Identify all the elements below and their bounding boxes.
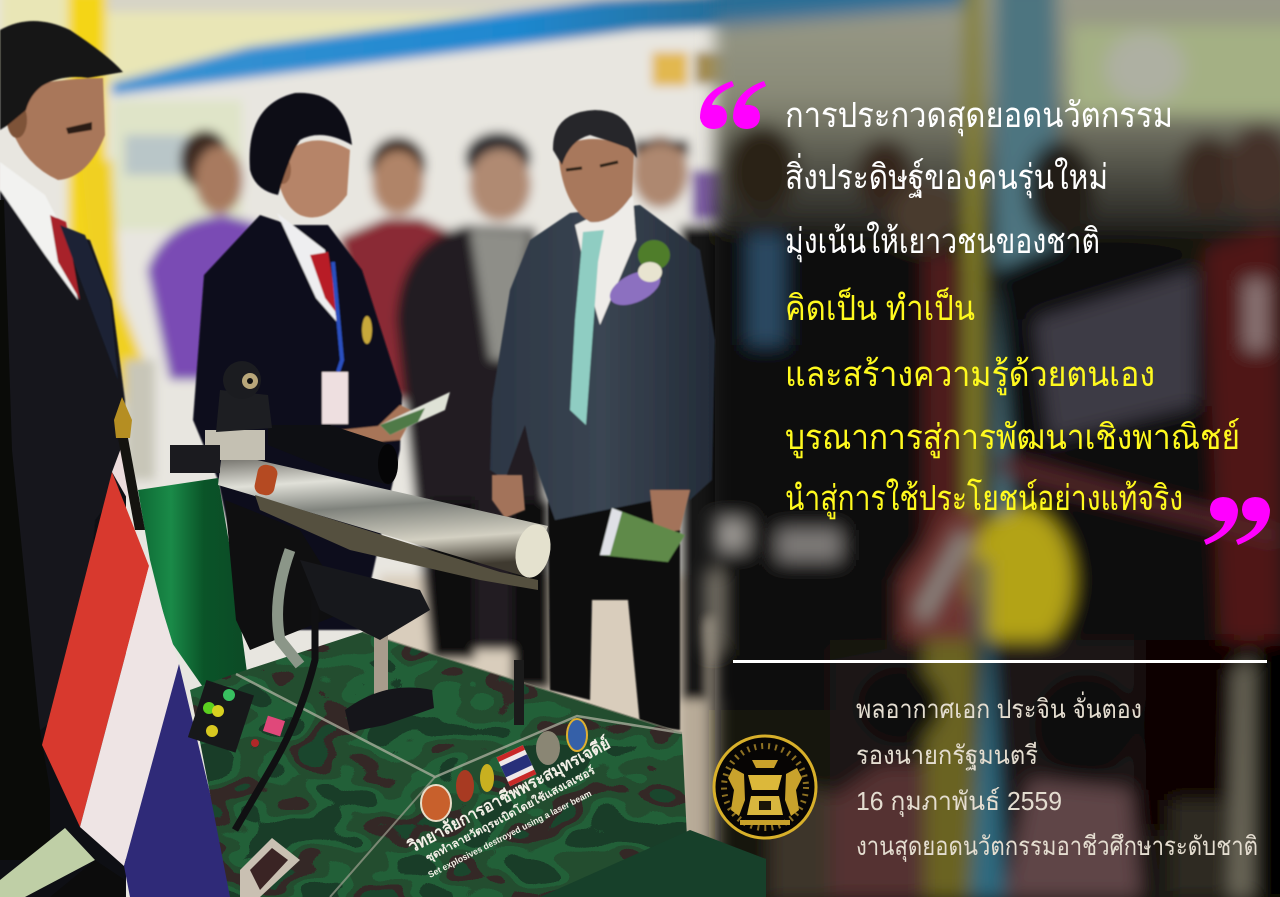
rear person bbox=[632, 136, 688, 208]
photo: left student bbox=[0, 21, 125, 730]
attribution text: 16 กุมภาพันธ์ 2559 bbox=[856, 786, 1062, 817]
robot label text: ชุดทำลายวัตถุระเบิดโดยใช้แสงเลเซอร์ bbox=[423, 763, 598, 866]
robot label text: วิทยาลัยการอาชีพพระสมุทรเจดีย์ bbox=[404, 733, 614, 858]
flag pole with gold finial bbox=[114, 397, 145, 530]
attribution text: พลอากาศเอก ประจิน จั่นตอง bbox=[856, 691, 1142, 724]
blurred crowd bodies bbox=[715, 229, 965, 640]
blurred ribbon and yellow bloom bbox=[900, 510, 980, 640]
opening quotation mark bbox=[700, 81, 766, 129]
Thai flag bbox=[42, 440, 246, 897]
seal of the Prime Minister's office bbox=[714, 736, 816, 838]
blurred lower ribbons bbox=[715, 650, 830, 710]
photo: left black object bbox=[0, 200, 125, 897]
photo: central man bbox=[490, 110, 715, 730]
blurred documents bbox=[715, 520, 747, 550]
purple shirt person bbox=[180, 130, 230, 190]
quote: white lines: มุ่งเน้นให้เยาวชนของชาติ bbox=[785, 221, 1100, 262]
blurred exhibition background bbox=[0, 0, 810, 897]
robot base with camouflage bbox=[180, 620, 780, 897]
blurred dark right panel background bbox=[706, 0, 1280, 897]
quote: yellow lines: บูรณาการสู่การพัฒนาเชิงพาณิชย์ bbox=[785, 418, 1240, 458]
robot track bbox=[240, 830, 766, 897]
lower-left dark backdrop bbox=[0, 460, 126, 897]
silver barrel bbox=[218, 452, 555, 590]
photo: middle student bbox=[193, 93, 450, 630]
quote: white lines: การประกวดสุดยอดนวัตกรรม bbox=[785, 96, 1173, 136]
dark suit person bbox=[465, 132, 531, 184]
quote: white lines: สิ่งประดิษฐ์ของคนรุ่นใหม่ bbox=[785, 153, 1108, 198]
robot label logos bbox=[421, 719, 587, 821]
robot mount column and game controller bbox=[300, 560, 524, 732]
blurred crowd heads bbox=[726, 124, 798, 212]
quote: yellow lines bbox=[785, 287, 1240, 519]
quote: yellow lines: คิดเป็น ทำเป็น bbox=[785, 287, 975, 328]
telescopic scope and camera bbox=[170, 361, 398, 485]
divider line bbox=[733, 660, 1267, 663]
attribution text: รองนายกรัฐมนตรี bbox=[856, 740, 1038, 771]
red jacket person bbox=[370, 137, 426, 193]
closing quotation mark bbox=[1204, 497, 1270, 545]
quote: yellow lines: นำสู่การใช้ประโยชน์อย่างแท้จริง bbox=[785, 478, 1183, 519]
control panel buttons bbox=[188, 680, 285, 753]
quote: yellow lines: และสร้างความรู้ด้วยตนเอง bbox=[785, 355, 1155, 395]
attribution text bbox=[856, 691, 1258, 862]
quote: white lines bbox=[785, 96, 1173, 262]
cable and spring bbox=[235, 550, 315, 830]
green cloth table bbox=[138, 478, 350, 690]
robot label text: Set explosives destroyed using a laser beam bbox=[426, 788, 593, 880]
